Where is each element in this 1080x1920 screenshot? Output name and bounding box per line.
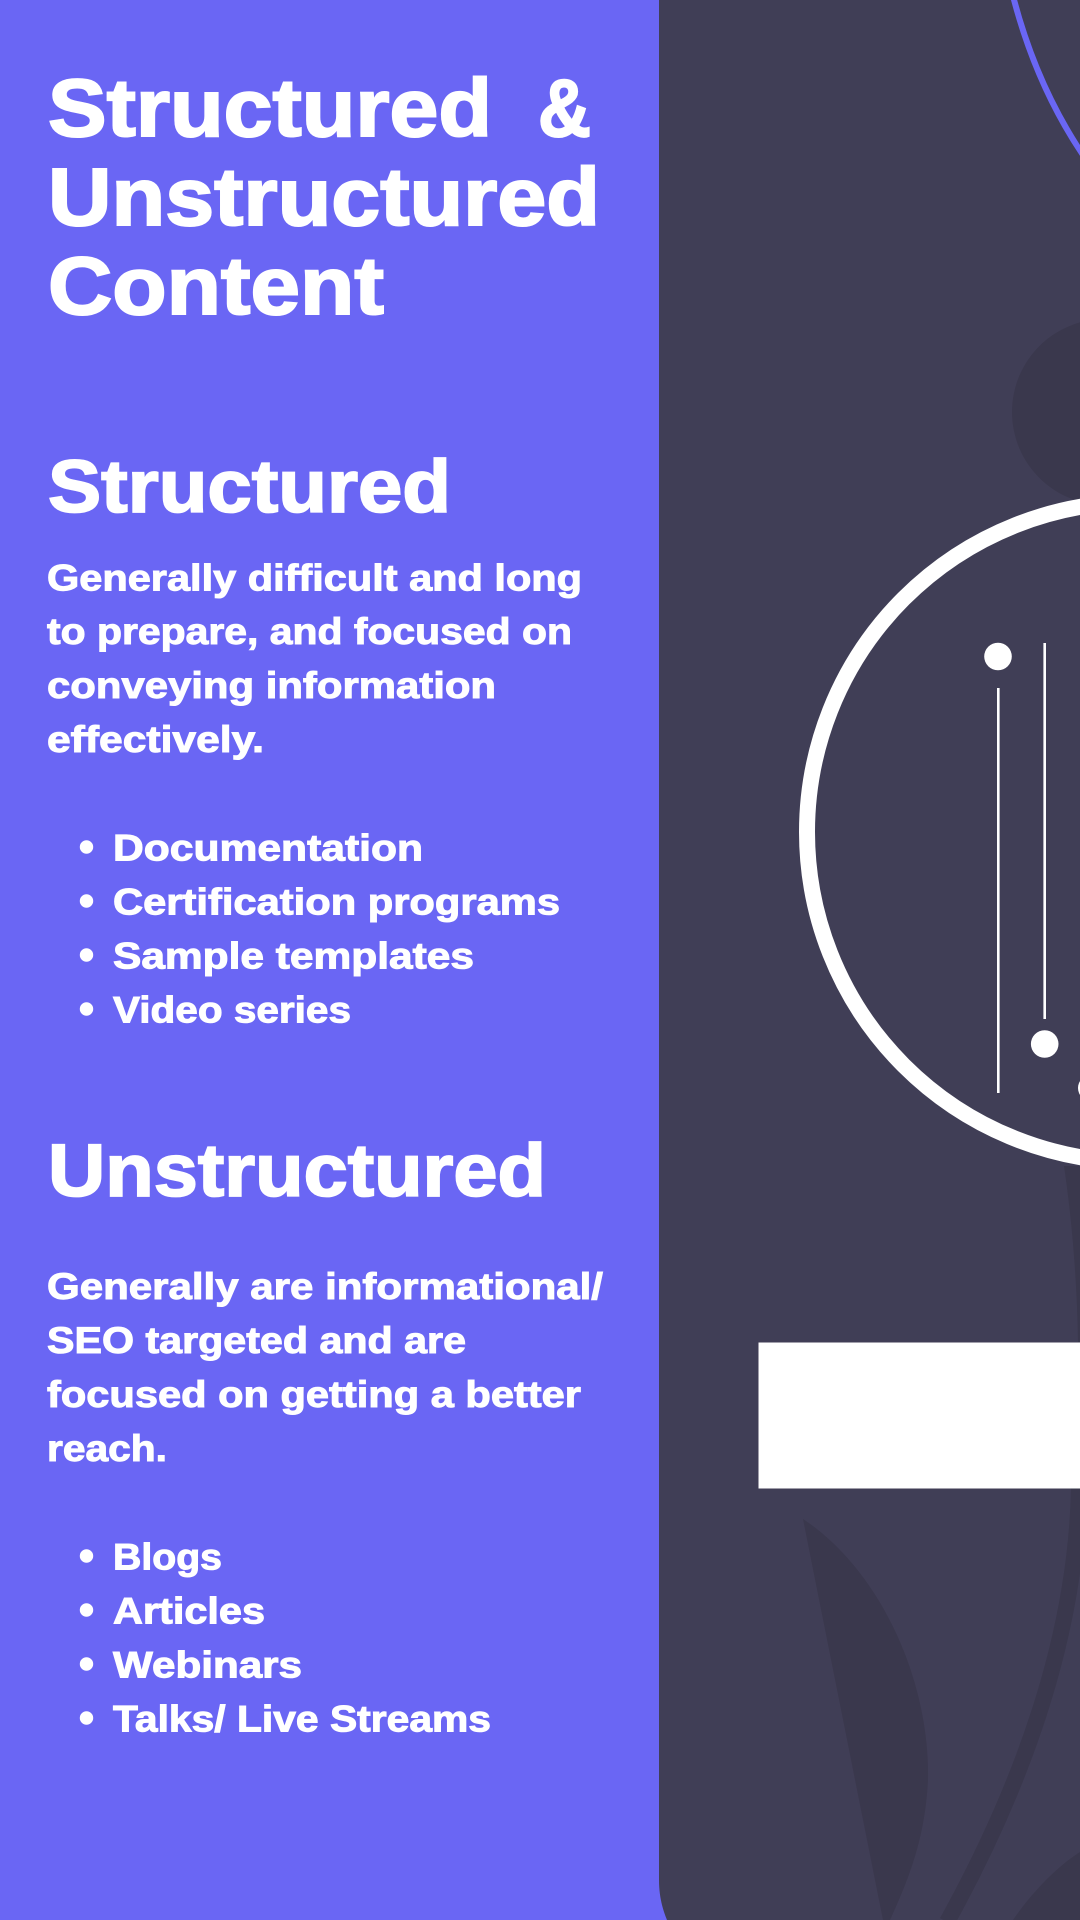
heading: Structured: Structured (48, 445, 451, 528)
list: structured content types: Video series (113, 990, 351, 1030)
text block: unstructured description: reach. (47, 1428, 167, 1469)
icon: white ring with lines and dots (807, 502, 1080, 1162)
title: Structured (48, 63, 492, 154)
icon: shaded circle (1012, 319, 1080, 505)
text block: unstructured description (47, 1266, 603, 1469)
text block: unstructured description: Generally are informational/ (47, 1266, 603, 1307)
text block: structured description: to prepare, and focused on (47, 611, 572, 652)
icon: stem stripe (947, 1166, 1080, 1920)
title: & (538, 63, 591, 154)
title: Content (48, 241, 384, 332)
title (48, 63, 600, 332)
icon: purple arc (1013, 0, 1080, 155)
text block: structured description: Generally difficult and long (47, 558, 582, 598)
list: structured content types: Documentation (113, 828, 423, 868)
panel: dark illustration panel (659, 0, 1080, 1920)
text block: structured description (47, 558, 582, 760)
text block: unstructured description: focused on getting a better (47, 1374, 581, 1415)
list: unstructured content types (80, 1536, 491, 1740)
list: structured content types (80, 828, 560, 1030)
text block: unstructured description: SEO targeted and are (47, 1320, 466, 1361)
dark panel shape (659, 0, 1080, 1920)
list: unstructured content types: Webinars (113, 1644, 302, 1686)
list: structured content types: Sample templates (113, 936, 474, 976)
text block: structured description: conveying information (47, 665, 496, 706)
list: unstructured content types: Blogs (113, 1536, 222, 1578)
white banner rectangle (758, 1342, 1080, 1488)
icon: large leaf (803, 1519, 928, 1920)
icon: corner leaf (1013, 1852, 1080, 1920)
heading: Unstructured: Unstructured (48, 1129, 546, 1212)
title: Unstructured (48, 152, 600, 243)
list: unstructured content types: Articles (113, 1590, 265, 1632)
list: structured content types: Certification programs (113, 882, 560, 922)
list: unstructured content types: Talks/ Live Streams (113, 1698, 491, 1740)
text block: structured description: effectively. (47, 719, 264, 760)
